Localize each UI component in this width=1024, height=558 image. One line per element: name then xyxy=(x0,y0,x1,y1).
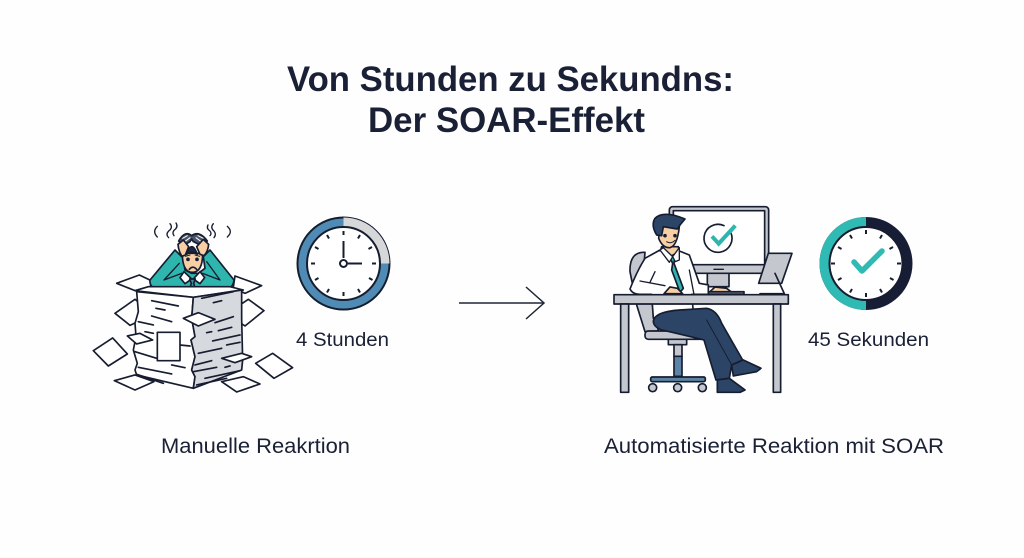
desk xyxy=(614,295,788,392)
caption: manual response: Manuelle Reakrtion xyxy=(161,435,350,458)
label: 45 Sekunden: 45 Sekunden xyxy=(808,330,929,351)
person upper body xyxy=(630,214,744,318)
head xyxy=(182,253,203,272)
title: Von Stunden zu Sekundns: xyxy=(287,60,734,99)
trousers and shoes xyxy=(653,308,761,392)
title xyxy=(287,60,734,140)
papers on stack xyxy=(183,313,215,326)
arrow xyxy=(459,287,544,319)
paper stack xyxy=(127,287,252,388)
label: 4 Stunden: 4 Stunden xyxy=(296,330,389,351)
hands xyxy=(178,240,189,256)
illustration: relaxed person at desk with monitor xyxy=(614,207,792,392)
monitor xyxy=(669,207,769,287)
stress marks xyxy=(155,223,230,238)
caption: automated response: Automatisierte Reaktion mit SOAR xyxy=(604,435,944,458)
clock: 4 Stunden xyxy=(298,218,390,310)
loose papers xyxy=(93,275,293,392)
clock: 45 Sekunden xyxy=(820,217,912,310)
chair xyxy=(630,252,706,392)
laptop xyxy=(759,253,792,294)
stressed person xyxy=(150,223,234,289)
paper stack lines xyxy=(135,301,190,383)
icon: check mark xyxy=(854,251,882,271)
face xyxy=(187,258,189,260)
illustration: stressed person behind paper stack xyxy=(93,223,293,392)
icon: check in circle xyxy=(704,224,735,252)
title: Der SOAR-Effekt xyxy=(368,101,645,140)
